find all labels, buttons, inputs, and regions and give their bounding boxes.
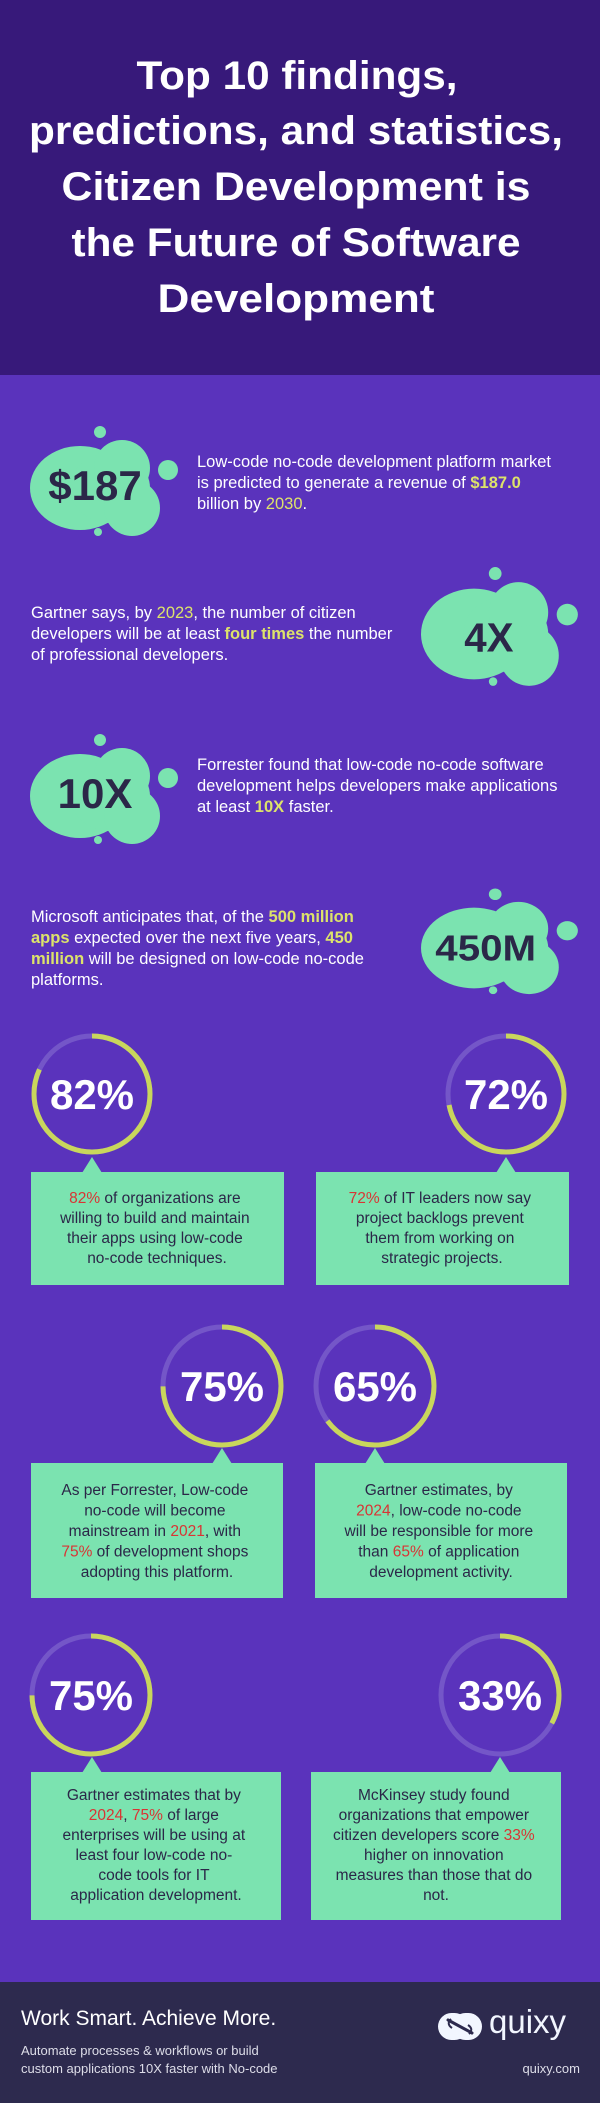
callout box: forrester: 75% of development shops	[61, 1544, 248, 1560]
ring: 72%: 72%	[464, 1071, 548, 1118]
callout box: 65%: than 65% of application	[358, 1544, 519, 1560]
ring: 82%: 82%	[50, 1071, 134, 1118]
callout box: mckinsey: measures than those that do	[336, 1867, 532, 1884]
title	[29, 54, 563, 321]
text: market revenue: Low-code no-code development platform market	[197, 453, 551, 471]
stat 4: 450M	[31, 888, 578, 994]
text: microsoft apps: platforms.	[31, 971, 103, 989]
header background	[0, 0, 600, 375]
callout box: 82%: their apps using low-code	[67, 1230, 243, 1247]
title: predictions, and statistics,	[29, 109, 563, 153]
title: the Future of Software	[72, 221, 520, 265]
text: microsoft apps: Microsoft anticipates that, of the 500 million	[31, 908, 354, 926]
ring: 75%: 75%	[180, 1363, 264, 1410]
footer description: Automate processes & workflows or build	[21, 2043, 259, 2058]
callout box: gartner 75%: application development.	[70, 1887, 242, 1904]
stat 3: 10X	[30, 734, 562, 844]
callout box: 72%	[316, 1157, 569, 1285]
blob: 4X: 4X	[464, 614, 513, 660]
text: 10X faster: Forrester found that low-code no-code software	[197, 756, 544, 774]
text: 10X faster: at least 10X faster.	[197, 798, 334, 816]
ring: 33%: 33%	[458, 1672, 542, 1719]
callout box: 72%: them from working on	[365, 1230, 514, 1247]
stat 2: 4X	[31, 567, 578, 686]
text: citizen developers: Gartner says, by 2023, the number of citizen	[31, 604, 356, 622]
callout box: mckinsey	[311, 1757, 561, 1920]
callout box: 72%: 72% of IT leaders now say	[349, 1190, 531, 1207]
text: citizen developers: of professional developers.	[31, 646, 228, 664]
ring: 75%	[32, 1636, 150, 1754]
ring: 75%: 75%	[49, 1672, 133, 1719]
callout box: 65%	[315, 1448, 567, 1598]
blob: $187	[30, 426, 178, 536]
ring: 65%	[316, 1327, 434, 1445]
text: market revenue: is predicted to generate a revenue of $187.0	[197, 474, 521, 492]
footer	[0, 1982, 600, 2103]
stat 1: $187	[30, 426, 556, 536]
panel: 75% forrester	[31, 1327, 283, 1598]
callout box: 82%: no-code techniques.	[87, 1250, 227, 1267]
callout box: 82%	[31, 1157, 284, 1285]
panel: 75% gartner	[31, 1636, 281, 1920]
callout box: 65%: 2024, low-code no-code	[356, 1502, 522, 1520]
callout box: 82%: willing to build and maintain	[59, 1210, 250, 1227]
panel: 82%	[31, 1036, 284, 1285]
footer url: quixy.com	[522, 2061, 580, 2076]
blob: 450M	[421, 888, 578, 994]
text: citizen developers: developers will be at least four times the number	[31, 625, 392, 643]
callout box: mckinsey: higher on innovation	[364, 1847, 504, 1864]
panel: 72%	[316, 1036, 569, 1285]
callout box: gartner 75%	[31, 1757, 281, 1920]
callout box: 72%: strategic projects.	[381, 1250, 503, 1267]
blob: $187: $187	[48, 462, 142, 509]
text: microsoft apps: million will be designed on low-code no-code	[31, 950, 364, 968]
text: market revenue: billion by 2030.	[197, 495, 307, 513]
callout box: gartner 75%: code tools for IT	[98, 1867, 210, 1884]
title: Development	[158, 277, 434, 321]
body background	[0, 375, 600, 1982]
callout box: 65%: development activity.	[369, 1564, 513, 1581]
blob: 10X: 10X	[58, 770, 132, 817]
ring: 33%	[441, 1636, 559, 1754]
blob: 450M: 450M	[435, 928, 536, 969]
panel: 33%	[311, 1636, 561, 1920]
title: Top 10 findings,	[136, 54, 458, 98]
text: microsoft apps: apps expected over the next five years, 450	[31, 929, 353, 947]
callout box: mckinsey: citizen developers score 33%	[333, 1827, 535, 1844]
title: Citizen Development is	[62, 165, 530, 209]
ring: 82%	[34, 1036, 150, 1152]
panel: 65%	[315, 1327, 567, 1598]
callout box: mckinsey: McKinsey study found	[358, 1787, 510, 1804]
callout box: 65%: will be responsible for more	[344, 1523, 533, 1540]
callout box: 72%: project backlogs prevent	[356, 1210, 525, 1227]
callout box: forrester: As per Forrester, Low-code	[61, 1482, 248, 1499]
ring: 75%	[163, 1327, 281, 1445]
text: 10X faster: development helps developers make applications	[197, 777, 557, 795]
callout box: gartner 75%: Gartner estimates that by	[67, 1787, 241, 1804]
blob: 4X	[421, 567, 578, 686]
callout box: forrester: adopting this platform.	[81, 1564, 233, 1581]
ring: 72%	[448, 1036, 564, 1152]
ring: 65%: 65%	[333, 1363, 417, 1410]
logo wordmark: quixy	[489, 2003, 567, 2040]
footer tagline: Work Smart. Achieve More.	[21, 2007, 276, 2030]
callout box: forrester: mainstream in 2021, with	[69, 1523, 241, 1540]
callout box: mckinsey: not.	[423, 1887, 449, 1904]
footer description: custom applications 10X faster with No-code	[21, 2061, 278, 2076]
blob: 10X	[30, 734, 178, 844]
callout box: mckinsey: organizations that empower	[339, 1807, 529, 1824]
callout box: gartner 75%: least four low-code no-	[75, 1847, 232, 1864]
callout box: forrester	[31, 1448, 283, 1598]
callout box: gartner 75%: enterprises will be using at	[63, 1827, 246, 1844]
callout box: 65%: Gartner estimates, by	[365, 1482, 513, 1499]
icon: quixy logo	[438, 2013, 482, 2040]
callout box: forrester: no-code will become	[84, 1502, 225, 1520]
callout box: gartner 75%: 2024, 75% of large	[89, 1807, 219, 1824]
callout box: 82%: 82% of organizations are	[69, 1190, 241, 1207]
